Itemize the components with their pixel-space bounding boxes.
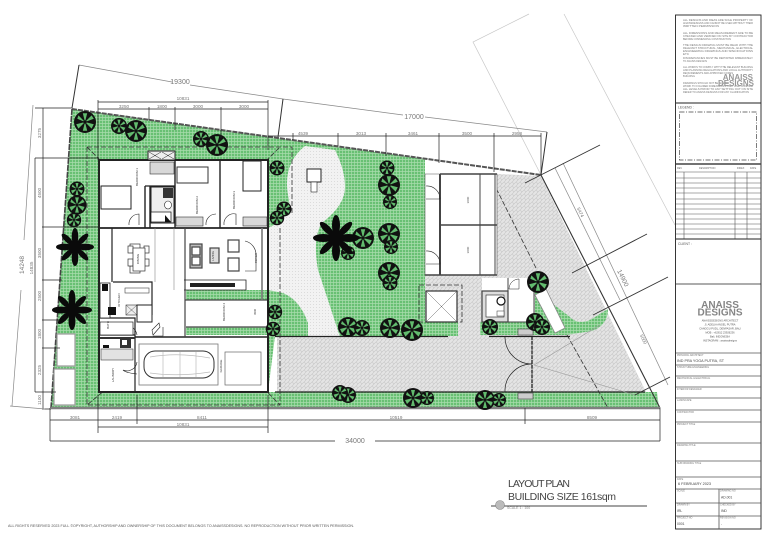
title block: [676, 15, 761, 529]
notes watermark logo: ANAISS: [723, 73, 754, 82]
gate: [505, 329, 533, 399]
revision table: [676, 103, 761, 239]
dimension labels: 3461: [408, 131, 419, 136]
title underline: [491, 505, 647, 507]
dimension labels: 2958: [512, 131, 523, 136]
title block frame: [676, 15, 761, 529]
notes watermark logo: DESIGNS: [718, 79, 755, 88]
general notes: REFER TO ANAISS DESIGNS FOR ANY CLARIFICATION: [683, 91, 749, 94]
copyright line: ALL RIGHTS RESERVED 2023 FULL ©OPYRIGHT, AUTHORSHIP AND OWNERSHIP OF THIS DOCUMENT BELONGS TO ANAISSDESIGNS. NO REPRODUCTION WITHOUT PRIOR WRITTEN PERMISSION.: [8, 524, 354, 528]
general notes: ALL DESIGNS AND IDEAS ARE SOLE PROPERTY OF: [683, 19, 754, 22]
company logo: DESIGNS: [697, 308, 743, 318]
bedroom 1 bed: [101, 186, 131, 209]
dimension labels: 10519: [390, 415, 403, 420]
general notes: BEFORE COMMENCING CONSTRUCTION: [683, 38, 731, 41]
project fields: REVISION NO: [720, 516, 736, 520]
general notes: [683, 19, 754, 94]
notes watermark logo: [718, 73, 755, 88]
general notes: ANAISSDESIGNS AND CANNOT BE USED WITHOUT THEIR: [683, 22, 753, 25]
dimension labels: 14835: [29, 261, 34, 274]
project fields: STRUCTURE ENGINEERING: [677, 366, 709, 369]
general notes: ALL DIMENSIONS AND MEASUREMENT ARE TO BE: [683, 32, 753, 35]
revision table header: INDEX: [737, 167, 745, 170]
room labels: BEDROOM 2: [195, 196, 199, 214]
landscape: grass areas: [51, 109, 659, 408]
dimension labels: 19300: [170, 79, 190, 86]
general notes: AND PLANNING REGULATIONS AND LOCAL AUTHORITY: [683, 69, 753, 72]
dimension labels: 2500: [37, 290, 42, 301]
company address: MOB : +62812 23926236: [705, 330, 735, 334]
dimension labels: 8411: [197, 415, 207, 420]
project fields: DATE: [677, 478, 684, 481]
company address: CANGGU PUDL, DENPASAR, BALI: [699, 326, 741, 330]
general notes: BUILDING: [683, 75, 695, 78]
dimension labels: 10831: [177, 96, 190, 101]
dimension labels: 1800: [37, 328, 42, 339]
scale marker: [496, 500, 504, 510]
project fields: LANDSCAPE: [677, 399, 692, 402]
general notes: TO ANAISS DESIGNS: [683, 60, 707, 63]
door swings: [123, 214, 256, 374]
general notes: ALL WORKS TO COMPLY WITH THE RELEVANT BUILDING: [683, 66, 753, 69]
revision table header: DESCRIPTION: [699, 167, 716, 170]
dimension labels: 3500: [462, 131, 473, 136]
dimension labels: 2325: [37, 364, 42, 375]
landscape: right garden bed: [480, 290, 608, 335]
project fields: CONTRACTOR: [677, 411, 694, 414]
company address: Bali, INDONESIA: [710, 334, 730, 338]
guard house: [482, 278, 534, 322]
room labels: GARAGE: [219, 360, 223, 372]
dimension labels: 3250: [119, 104, 130, 109]
TV unit: [190, 283, 235, 287]
general notes: CHECKED AND VERIFIED ON SITE BY CONTRACTOR: [683, 35, 753, 38]
general notes: ENGINEERING DRAWINGS AND SPECIFICATIONS: [683, 50, 753, 53]
revision table header: DATE: [750, 167, 757, 170]
project values: IND PRA YOGA PUTRA, ST: [677, 359, 724, 363]
room labels: LIVING: [211, 250, 215, 261]
dimension labels: 5474: [576, 207, 585, 218]
project fields: PRINCIPAL ARCHITECT: [677, 354, 704, 357]
room labels: FOYER: [254, 252, 258, 263]
project fields: MECHANICAL & ELECTRICAL: [677, 377, 711, 380]
project fields: DRAWN BY: [677, 504, 690, 506]
landscape: driveway paving: [277, 174, 646, 392]
room labels: BEDROOM 1: [135, 168, 139, 186]
dimension labels: 1800: [157, 104, 168, 109]
room labels: [106, 168, 258, 382]
general notes: ALL LEVELS PRIOR TO ANY SETTING OUT ON SITE: [683, 88, 753, 91]
dimension labels: [19, 79, 648, 445]
dimension extension ticks: [72, 65, 670, 395]
dimension labels: 17000: [404, 114, 424, 121]
dimension labels: 34000: [345, 438, 365, 445]
general notes: ETC: [683, 53, 689, 56]
water tanks left: [54, 334, 75, 405]
general notes: WORK TO FIGURED DIMENSIONS ONLY AND CONFIRM: [683, 85, 753, 88]
terrace planter: [186, 290, 267, 300]
general notes: DRAWINGS SHOULD NOT BE SCALED: [683, 82, 729, 85]
right outbuilding: [425, 174, 497, 275]
block dividers: [676, 284, 761, 529]
project values: IRL: [677, 509, 682, 513]
company address: [699, 318, 741, 342]
room labels: WIR: [253, 308, 257, 315]
dimension labels: 3000: [193, 104, 204, 109]
dimension labels: 5000: [639, 334, 648, 345]
car: [139, 344, 218, 385]
company address: Jl. ADELIA ANGEL PUTRA: [704, 322, 736, 326]
room labels: DINING: [136, 253, 140, 264]
general notes: WRITTEN PERMISSION: [683, 25, 719, 28]
bathroom fixtures: [151, 187, 174, 223]
dimension labels: 3000: [239, 104, 250, 109]
project values: -: [721, 522, 722, 526]
house floor slab: [99, 160, 268, 392]
trees: [67, 111, 550, 410]
garden seat: [307, 169, 321, 192]
dimension labels: 14900: [615, 269, 630, 288]
room labels: BEDROOM 4: [222, 303, 226, 321]
project values: [677, 359, 732, 526]
project fields: CHECKED BY: [720, 504, 736, 506]
project fields: SUB DRAWING TITLE: [677, 462, 702, 465]
drawing title: [491, 478, 647, 510]
neighbouring plot outline: [473, 14, 675, 225]
pavilion: [419, 285, 462, 322]
wardrobes: [150, 162, 267, 226]
revision table header: REV: [677, 167, 682, 170]
water tank right: [535, 289, 565, 333]
company logo: [697, 300, 743, 318]
general notes: REQUIREMENTS AND APPROVED CODES: [683, 72, 733, 75]
walls: [99, 160, 268, 392]
dimension labels: 4500: [37, 187, 42, 198]
dimension labels: 3275: [37, 127, 42, 138]
site boundary: [51, 109, 660, 408]
room labels: KITCHEN: [117, 293, 121, 307]
dimension labels: 8509: [587, 415, 598, 420]
legend heading: LEGEND :: [678, 106, 694, 110]
project fields: PROJECT TITLE: [677, 423, 696, 426]
dimension labels: 1100: [37, 395, 42, 405]
project fields: DRAWING NO: [720, 490, 736, 492]
project values: IND: [721, 509, 727, 513]
house floor plan: [99, 160, 268, 392]
legend box: [680, 112, 756, 160]
carport lines: [534, 325, 635, 395]
title text: LAYOUT PLAN: [508, 478, 570, 490]
dimension labels: 2419: [112, 415, 123, 420]
landscape: green bar below pavilion: [418, 322, 458, 336]
company logo: ANAISS: [701, 300, 739, 311]
living sofas: [190, 240, 239, 271]
roof outline dashed lines: [87, 147, 608, 408]
room labels: LAUNDRY: [111, 368, 115, 382]
bedroom 2 bed: [177, 167, 208, 183]
project fields: PROJECT NO: [677, 516, 693, 520]
revision table header: [677, 167, 757, 170]
project fields: INTERIOR DESIGNER: [677, 388, 702, 391]
dimension lines: [35, 100, 660, 441]
landscape: paved garden path: [268, 146, 345, 337]
pergola at front: [148, 151, 175, 160]
palm trees: [52, 215, 359, 330]
general notes: DISCREPANCIES MUST BE REPORTED IMMEDIATELY: [683, 57, 753, 60]
right outbuilding: 3000: [466, 246, 470, 253]
building size text: BUILDING SIZE 161sqm: [508, 491, 616, 503]
dining table: [128, 244, 149, 273]
laundry and WC: [100, 322, 135, 360]
project fields: SCALE: [677, 490, 685, 492]
dimension labels: 10831: [177, 422, 190, 427]
garage storage: [225, 352, 261, 385]
general notes: THE DESIGN DRAWING MUST BE READ WITH THE: [683, 44, 753, 47]
dimension labels: 3013: [356, 131, 367, 136]
project values: 6 FEBRUARY 2023: [678, 482, 711, 486]
kitchen counter: [100, 283, 152, 322]
dimension labels: 3081: [70, 415, 81, 420]
overall dimension lines: [10, 65, 668, 409]
dimension labels: 14248: [19, 256, 26, 274]
landscape: grass strip at gate: [275, 392, 657, 408]
company address: ANAISSDESIGNS ARCHITECT: [702, 318, 739, 322]
right outbuilding: 3000: [466, 196, 470, 203]
dimension labels: 4539: [298, 131, 309, 136]
bedroom 3 bed: [243, 161, 261, 191]
side courtyard planter: [186, 327, 267, 335]
project fields: [677, 354, 736, 520]
room labels: BATH: [106, 321, 110, 329]
project values: 0001: [677, 522, 685, 526]
room labels: BEDROOM 3: [232, 191, 236, 209]
company address: INSTAGRAM : anaissdesigns: [703, 338, 738, 342]
dimension labels: 3500: [37, 247, 42, 258]
general notes: RELEVANT STRUCTURAL, MECHANICAL, ELECTRICAL: [683, 47, 754, 50]
project values: AD.001: [721, 496, 732, 500]
project fields: DRAWING TITLE: [677, 444, 696, 447]
scale text: SCALE 1 : 100: [507, 506, 530, 510]
client heading: CLIENT :: [678, 242, 692, 246]
